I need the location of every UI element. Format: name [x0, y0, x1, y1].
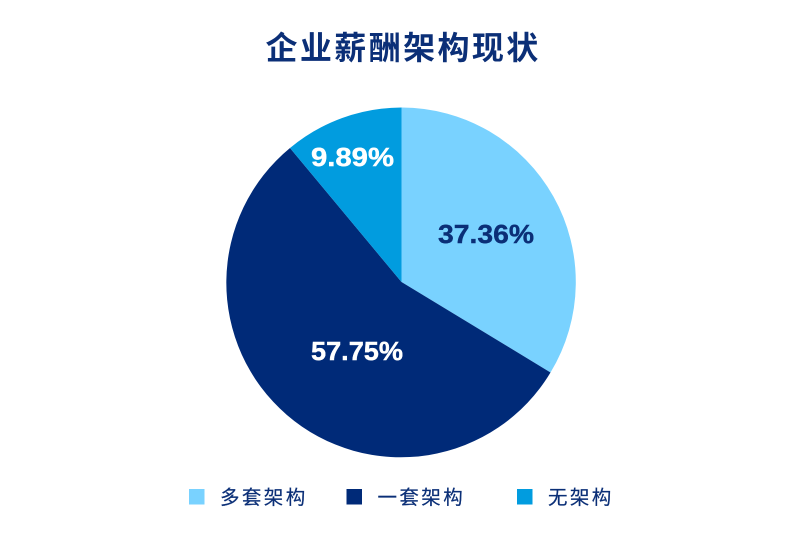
value label: 57.75%: 57.75% — [311, 336, 403, 366]
pie chart — [226, 108, 576, 457]
legend item: 无架构 — [517, 487, 614, 509]
value label: 37.36%: 37.36% — [438, 219, 534, 249]
slice: 无架构 9.89% — [290, 108, 402, 282]
legend item: 多套架构: 多套架构 — [220, 487, 308, 509]
legend item: 无架构: 无架构 — [548, 487, 614, 509]
legend item: 一套架构: 一套架构 — [378, 487, 465, 509]
legend — [189, 487, 614, 509]
title: 企业薪酬架构现状 — [266, 30, 541, 66]
slice: 多套架构 37.36% — [402, 108, 576, 372]
value label: 9.89%: 9.89% — [311, 142, 394, 172]
slice: 一套架构 57.75% — [226, 148, 550, 457]
